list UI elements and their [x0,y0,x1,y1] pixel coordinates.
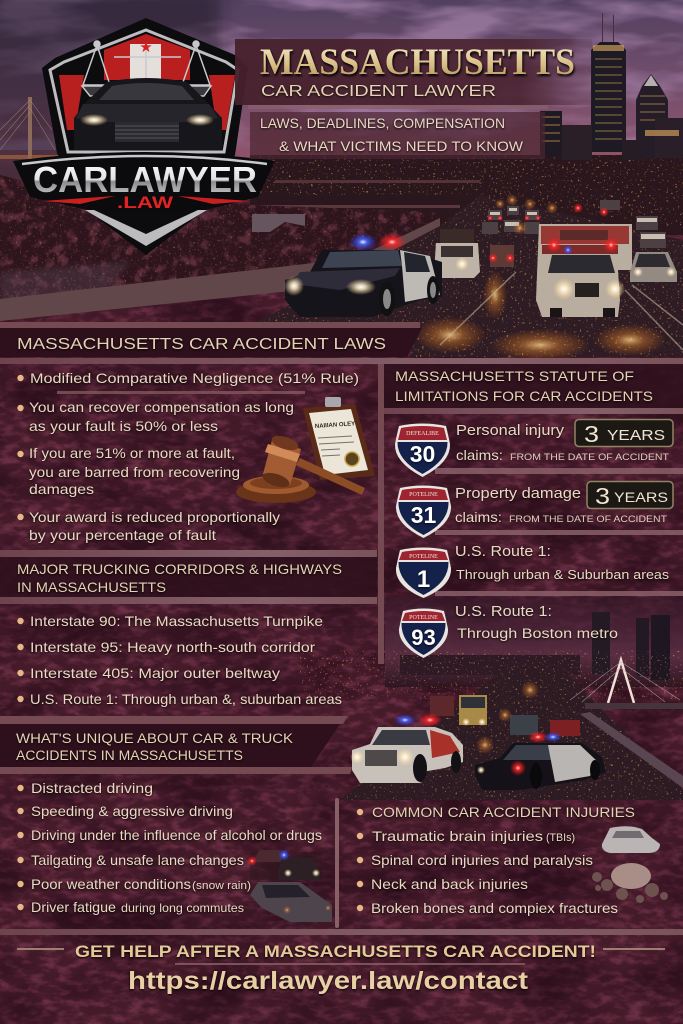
item: spinal cord injuries: Spinal cord injuries and paralysis [371,852,593,868]
item: traumatic brain injuries: (TBIs) [546,832,575,844]
icon: route 1 shield: POTELINE [409,554,438,560]
icon: clipboard and gavel: NAIIIAN OLEY [315,421,355,430]
item: interstate 90: Interstate 90: The Massachusetts Turnpike [30,613,323,629]
injuries heading: COMMON CAR ACCIDENT INJURIES [372,804,635,820]
item: poor weather: Poor weather conditions [31,876,191,892]
deadline badge: 3 years [575,420,673,447]
icon: interstate 93 shield: 93 [411,625,436,650]
car front [74,78,222,150]
skyline [540,13,683,160]
.LAW text: .LAW [117,193,174,212]
icon: clipboard and gavel [236,397,375,503]
scales of justice [82,41,211,96]
icon: interstate 31 shield [396,486,451,538]
icon: interstate 93 shield [399,608,448,658]
call-to-action heading: GET HELP AFTER A MASSACHUSETTS CAR ACCIDENT! [75,942,596,961]
bullet: recover compensation [17,399,294,434]
bullet: reduced award [17,509,280,543]
bullet: comparative negligence: Modified Comparative Negligence (51% Rule) [30,370,359,386]
item: traumatic brain injuries [357,828,575,844]
title backdrop [235,39,592,159]
item: speeding: Speeding & aggressive driving [31,803,233,819]
name banner [13,152,275,210]
shield body [42,18,248,255]
rescue truck [350,713,463,783]
panel: accident laws [17,370,375,543]
item: driving under the influence: Driving under the influence of alcohol or drugs [31,827,322,843]
icon: interstate 30 shield [395,424,450,477]
illustration: silver car [602,826,660,853]
list: common injuries [357,804,668,916]
deadline badge: 3 years [587,482,673,509]
icon: route 1 shield: 1 [417,566,430,593]
subtitle: CAR ACCIDENT LAWYER [261,83,496,100]
illustration: roadside cars [247,849,332,922]
section: what's unique heading band: ACCIDENTS IN MASSACHUSETTS [16,748,243,763]
title: MASSACHUSETTS [260,42,575,83]
truck at middle [434,229,515,278]
statute heading [384,364,683,408]
item: interstate 405: Interstate 405: Major outer beltway [30,665,280,681]
statute heading: LIMITATIONS FOR CAR ACCIDENTS [395,388,653,404]
row: property damage [396,482,673,538]
scene sky [385,597,683,687]
item: tailgating: Tailgating & unsafe lane changes [31,852,244,868]
ambulance [536,224,632,317]
hero: night city scene [0,0,683,361]
item: broken bones: Broken bones and compiex fractures [371,900,618,916]
list: highways [17,613,342,707]
icon: interstate 31 shield: 31 [411,502,436,528]
police car [284,233,442,317]
car beside ambulance [630,252,677,282]
lower skyline [400,612,670,680]
icon: interstate 93 shield: POTELINE [409,615,438,621]
sky [0,0,683,200]
row: property damage: claims: [455,509,502,525]
item: driver fatigue [17,899,244,915]
icon: interstate 30 shield: 30 [410,441,435,467]
illustration: rocks [592,863,668,903]
name banner: CARLAWYER [33,159,257,200]
tagline: LAWS, DEADLINES, COMPENSATION [260,115,505,131]
trees and water [0,175,440,299]
road [340,668,683,800]
traffic queue [482,194,666,248]
section: trucking corridors heading band: IN MASSACHUSETTS [17,579,166,595]
bullet: barred at 51 percent: If you are 51% or more at fault, [29,445,235,461]
second police car [475,731,606,790]
row: property damage: Property damage [455,485,581,502]
bullet: barred at 51 percent [17,445,240,497]
road rail [580,712,683,788]
distant traffic [430,681,580,754]
tagline [260,115,524,154]
red panels [59,75,235,130]
bullet: reduced award: Your award is reduced proportionally [29,509,280,525]
deadline badge: 3 years: YEARS [614,489,668,505]
deadline badge: 3 years: 3 [584,421,599,447]
contact url: https://carlawyer.law/contact [128,967,529,995]
icon: route 1 shield [396,548,451,598]
item: neck and back injuries: Neck and back injuries [371,876,528,892]
row: property damage: FROM THE DATE OF ACCIDENT [509,514,668,524]
item: driver fatigue: Driver fatigue [31,899,116,915]
panel: statute of limitations [384,364,683,658]
road [250,195,683,361]
section: trucking corridors heading band [0,557,377,597]
call to action [17,942,665,995]
section: trucking corridors heading band: MAJOR TRUCKING CORRIDORS & HIGHWAYS [17,561,342,577]
row: route 1: U.S. Route 1: [455,544,551,560]
city band [250,155,683,235]
city lights [300,650,683,700]
bullet: barred at 51 percent: damages [29,481,94,497]
concrete barrier [0,218,440,321]
deadline badge: 3 years: YEARS [607,427,665,444]
item: poor weather [17,876,251,892]
white bridge [570,660,683,709]
row: personal injury: FROM THE DATE OF ACCIDENT [510,452,670,462]
tagline: & WHAT VICTIMS NEED TO KNOW [279,138,524,154]
red swooshes [42,196,250,204]
deadline badge: 3 years: 3 [595,483,610,509]
statute heading: MASSACHUSETTS STATUTE OF [395,368,634,384]
row: route 1 [396,544,670,598]
row: route 93 [399,604,618,658]
logo: CarLawyer.Law shield [13,18,275,255]
row: personal injury: claims: [456,447,503,463]
item: route 1: U.S. Route 1: Through urban &, suburban areas [30,691,342,707]
item: traumatic brain injuries: Traumatic brain injuries [372,828,543,844]
flag and star: ★ [139,39,153,56]
row: route 93: Through Boston metro [457,626,618,641]
bullet: reduced award: by your percentage of fault [29,527,216,543]
row: personal injury: Personal injury [456,422,565,439]
bullet: recover compensation: as your fault is 50% or less [29,418,218,434]
bridge at left [0,97,60,159]
item: driver fatigue: during long commutes [121,901,244,915]
icon: interstate 31 shield: POTELINE [409,492,438,498]
bullet: recover compensation: You can recover compensation as long [29,399,294,415]
lower road scene [300,597,683,800]
title panel [235,39,592,159]
item: poor weather: (snow rain) [192,880,251,892]
bullet: barred at 51 percent: you are barred from recovering [29,464,240,480]
row: personal injury [395,420,673,477]
row: route 1: Through urban & Suburban areas [456,567,670,582]
item: distracted driving: Distracted driving [31,780,153,796]
section: laws heading band [0,328,422,357]
icon: interstate 30 shield: DEFEALIBE [406,431,439,437]
flag and star [104,34,190,80]
item: interstate 95: Interstate 95: Heavy north-south corridor [30,639,315,655]
row: route 93: U.S. Route 1: [455,604,552,620]
section: what's unique heading band [0,724,340,767]
section: laws heading band: MASSACHUSETTS CAR ACCIDENT LAWS [17,336,386,353]
section: what's unique heading band: WHAT'S UNIQUE ABOUT CAR & TRUCK [16,731,293,746]
list: accident causes [17,780,332,922]
